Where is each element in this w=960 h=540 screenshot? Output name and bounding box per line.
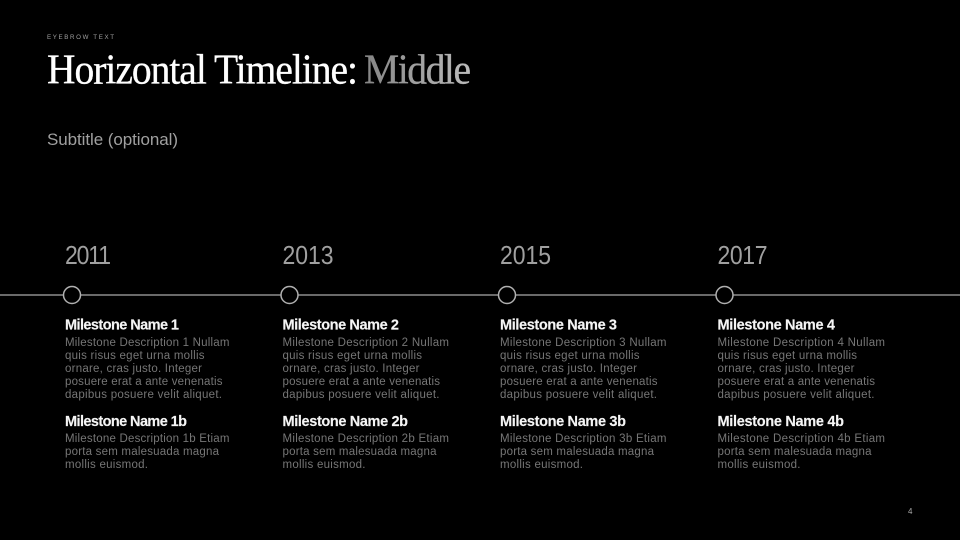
milestone 1b: Milestone Description 1b Etiam [65,433,230,445]
milestone 2b [282,414,449,471]
milestone 3b: mollis euismod. [500,459,583,471]
milestone 1b: Milestone Name 1b [65,414,187,430]
subtitle: Subtitle (optional) [47,130,178,149]
milestone column 2011 [64,242,230,471]
milestone 4: posuere erat a ante venenatis [718,376,875,388]
marker 2013 [281,286,298,304]
marker 2015 [498,286,516,304]
year 2015: 2015 [500,242,551,270]
milestone 4: ornare, cras justo. Integer [718,363,855,375]
milestone 2: quis risus eget urna mollis [282,350,422,362]
milestone 3: Milestone Name 3 [500,318,617,334]
milestone 1b: mollis euismod. [65,459,148,471]
milestone 2 [282,318,449,401]
milestone 3b: Milestone Description 3b Etiam [500,433,666,445]
year 2013: 2013 [282,242,334,270]
milestone 1: ornare, cras justo. Integer [65,363,202,375]
year 2017: 2017 [718,242,768,270]
milestone 4: Milestone Description 4 Nullam [718,337,885,349]
timeline line [0,294,960,296]
milestone 3b [500,414,666,471]
milestone 1: Milestone Description 1 Nullam [65,337,230,349]
milestone 1b [65,414,230,471]
milestone 2b: mollis euismod. [282,459,366,471]
milestone 1: Milestone Name 1 [65,318,179,334]
milestone 2b: porta sem malesuada magna [282,446,437,458]
milestone 2: dapibus posuere velit aliquet. [282,389,440,401]
milestone 3 [500,318,666,401]
milestone 3: dapibus posuere velit aliquet. [500,389,657,401]
milestone 1: posuere erat a ante venenatis [65,376,223,388]
milestone 2: posuere erat a ante venenatis [282,376,440,388]
milestone 1: dapibus posuere velit aliquet. [65,389,222,401]
milestone 4 [718,318,885,401]
year 2011: 2011 [65,242,111,270]
marker 2017 [716,286,733,304]
milestone 4: quis risus eget urna mollis [718,350,857,362]
milestone 3b: porta sem malesuada magna [500,446,655,458]
milestone 2: Milestone Name 2 [282,318,399,334]
milestone column 2017 [716,242,885,471]
milestone 4b: mollis euismod. [718,459,800,471]
milestone 2: ornare, cras justo. Integer [282,363,420,375]
milestone 1b: porta sem malesuada magna [65,446,220,458]
milestone 2b: Milestone Name 2b [282,414,408,430]
milestone 4b: Milestone Description 4b Etiam [718,433,885,445]
title: Middle [364,45,471,93]
milestone 4b: porta sem malesuada magna [718,446,872,458]
milestone 3: ornare, cras justo. Integer [500,363,637,375]
milestone 4b: Milestone Name 4b [718,414,844,430]
milestone 3: Milestone Description 3 Nullam [500,337,666,349]
milestone 3: posuere erat a ante venenatis [500,376,658,388]
eyebrow: EYEBROW TEXT [47,34,114,41]
milestone 2: Milestone Description 2 Nullam [282,337,449,349]
milestone 3: quis risus eget urna mollis [500,350,640,362]
milestone 2b: Milestone Description 2b Etiam [282,433,449,445]
milestone 4: Milestone Name 4 [718,318,835,334]
milestone column 2015 [498,242,666,471]
title: Horizontal Timeline: [47,45,358,93]
page number: 4 [908,507,913,516]
milestone 4b [718,414,885,471]
marker 2011 [64,286,80,304]
milestone 3b: Milestone Name 3b [500,414,626,430]
milestone 1: quis risus eget urna mollis [65,350,205,362]
milestone 1 [65,318,230,401]
milestone column 2013 [281,242,449,471]
milestone 4: dapibus posuere velit aliquet. [718,389,874,401]
